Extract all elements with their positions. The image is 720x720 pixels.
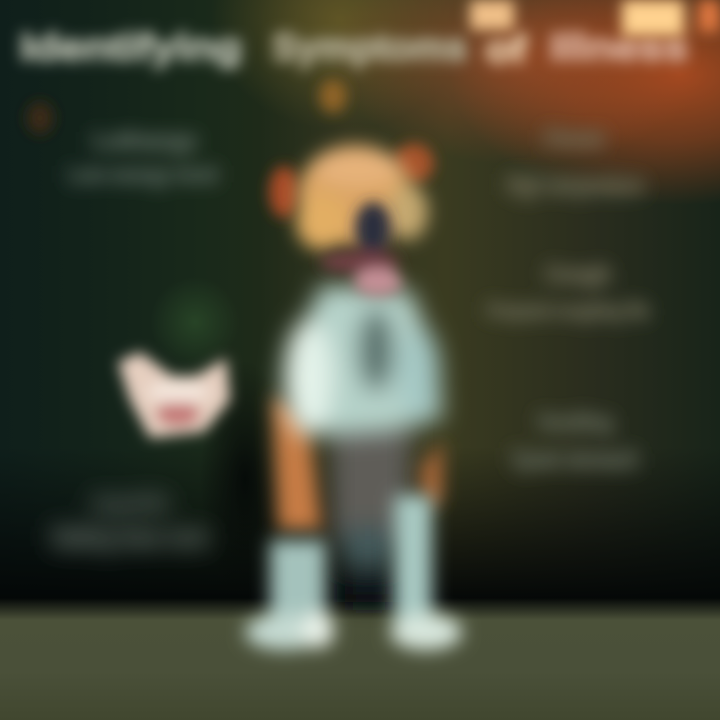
dog belly <box>332 415 410 602</box>
icon: top centre marker <box>319 79 347 113</box>
right label: middle: Frequent coughing fits <box>486 298 650 323</box>
title: Symptoms <box>272 27 467 69</box>
dog left leg and paw <box>245 540 334 650</box>
left label: upper <box>68 128 218 187</box>
title: Illness <box>550 27 688 69</box>
left label: upper: Lethargy <box>92 128 198 153</box>
right label: bottom: Vomiting <box>537 409 613 436</box>
dog muzzle <box>320 202 402 296</box>
right label: top <box>506 126 644 200</box>
illustration: dog <box>245 143 462 650</box>
icon: top left marker <box>27 102 53 134</box>
title: Identifying <box>20 27 242 69</box>
dog ears <box>269 143 434 218</box>
right label: bottom <box>511 409 639 474</box>
left label: lower: Eating less now <box>52 521 208 552</box>
right label: bottom: Upset stomach <box>511 443 639 474</box>
dog orange legs <box>272 395 442 530</box>
right label: middle <box>486 261 650 323</box>
dog head <box>296 145 428 250</box>
left label: lower: Appetite <box>90 490 170 515</box>
title: of <box>486 29 526 71</box>
title <box>20 27 688 71</box>
left label: lower <box>52 490 208 552</box>
right label: top: Fever <box>545 126 605 151</box>
left icon: white butterfly shape <box>118 352 230 438</box>
dog body <box>284 285 442 436</box>
right label: middle: Cough <box>545 261 611 288</box>
dog right leg and paw <box>390 495 462 650</box>
ground <box>0 598 720 720</box>
left label: upper: Low energy level <box>68 162 218 187</box>
top right glow accents <box>470 0 720 36</box>
